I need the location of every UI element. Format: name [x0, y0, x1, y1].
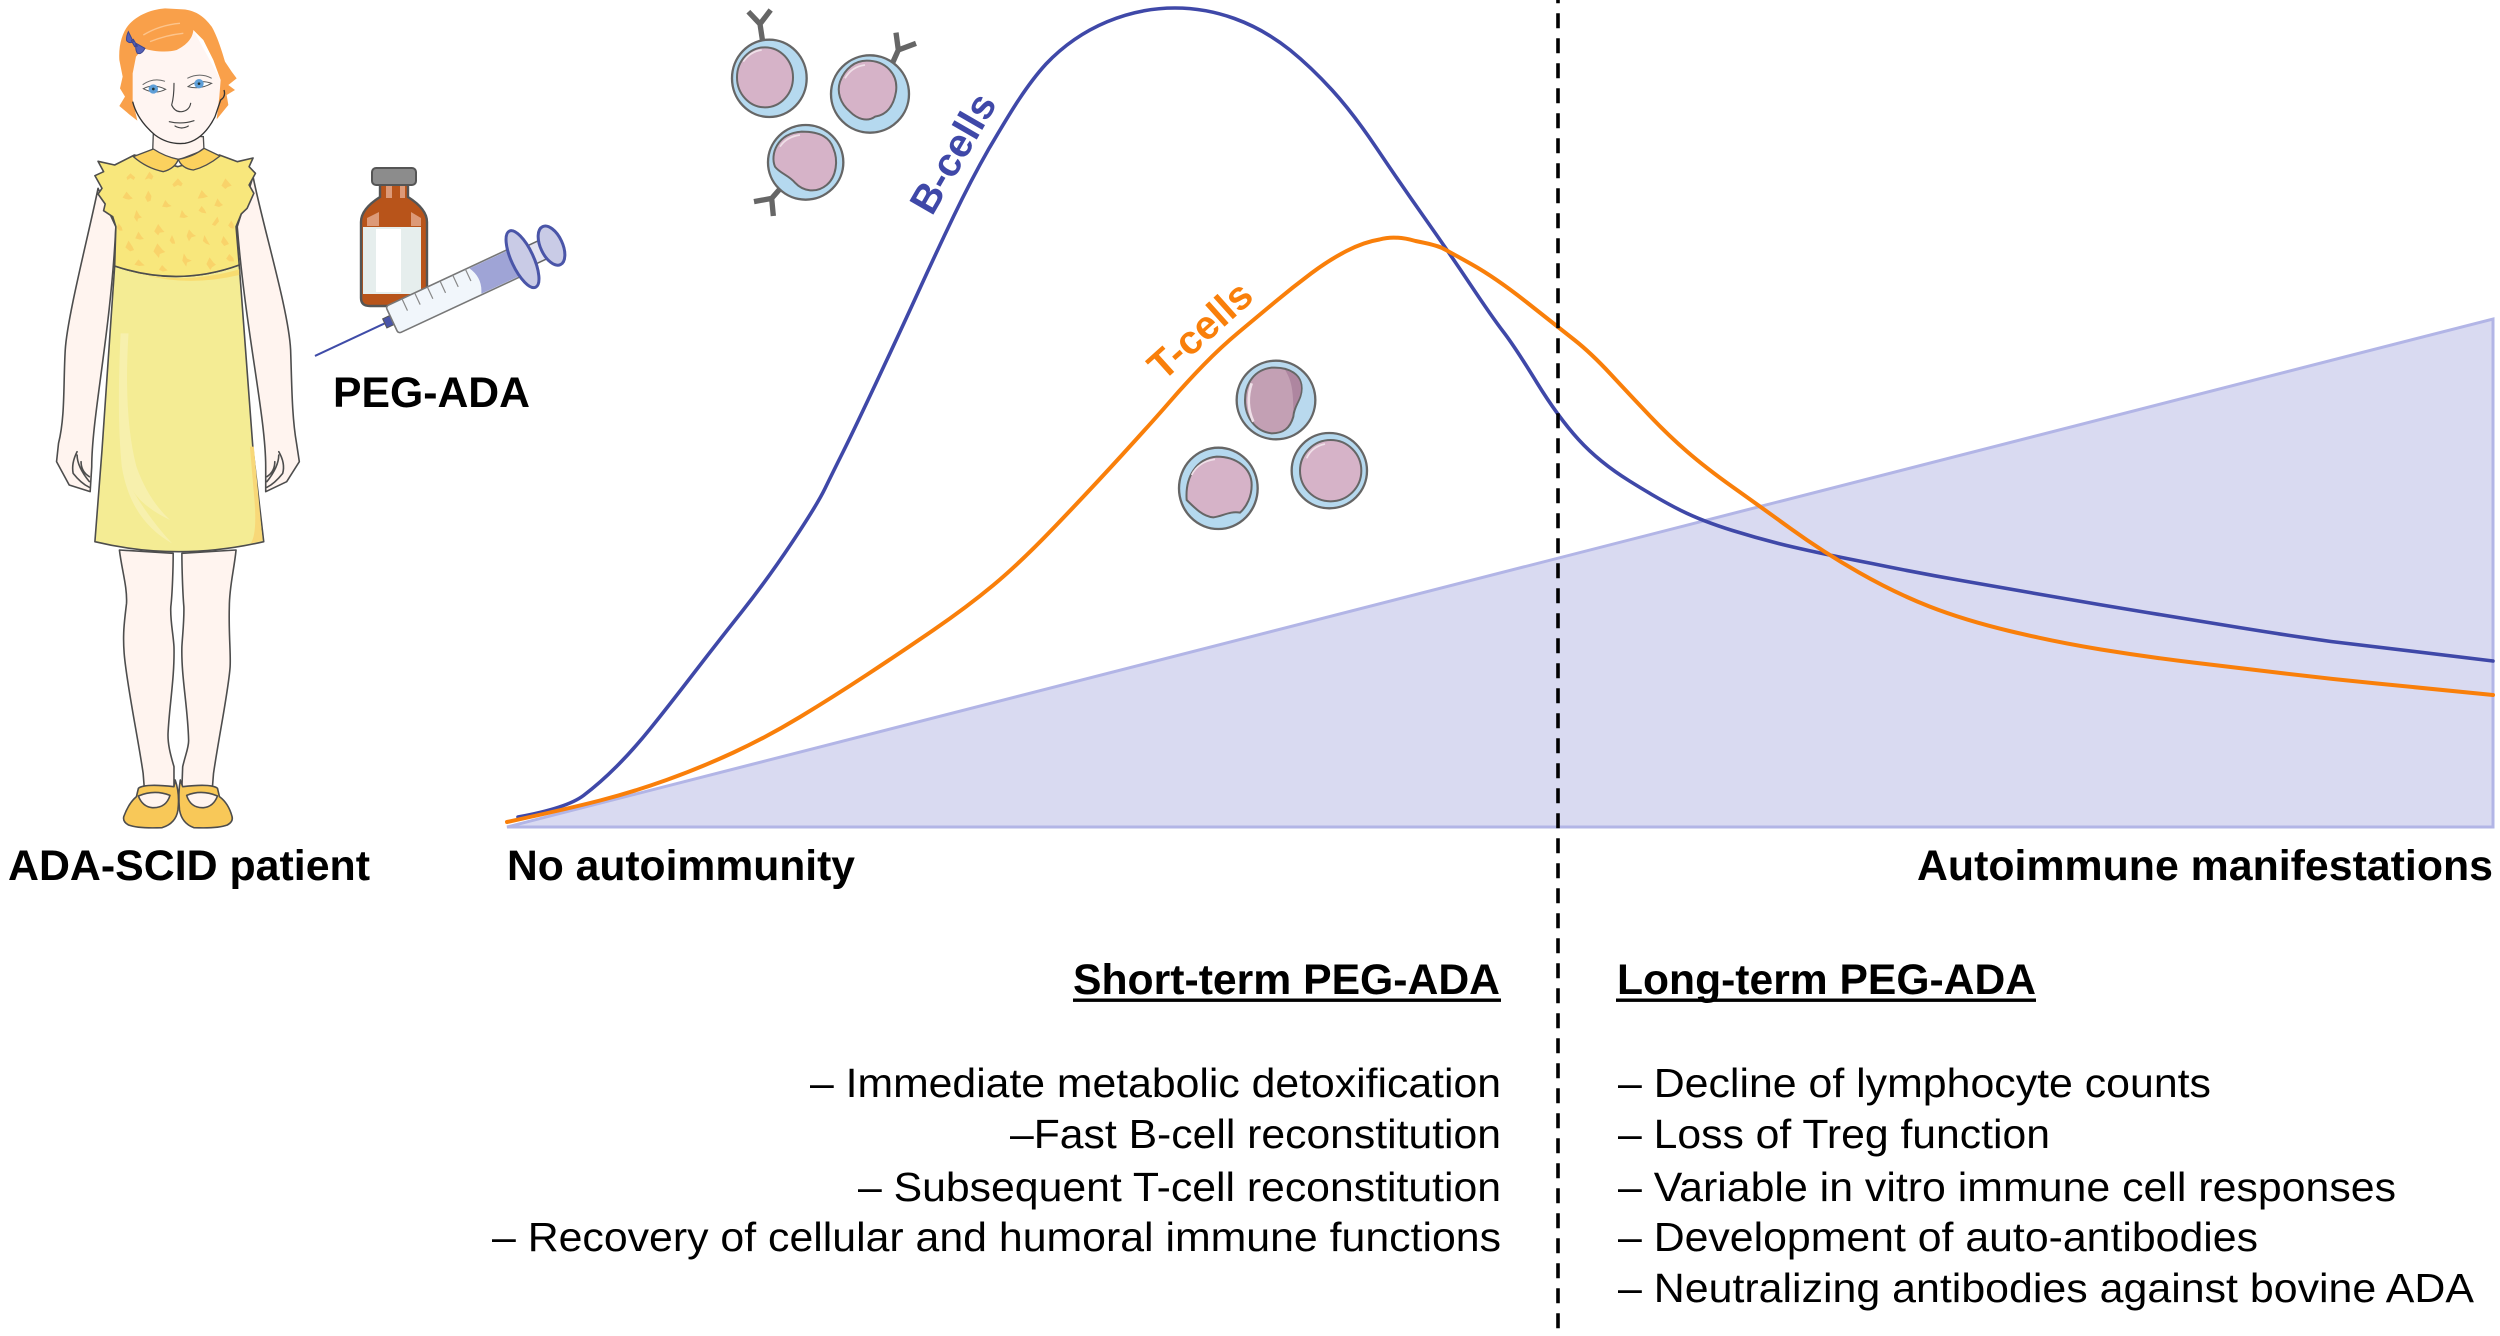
right leg	[182, 550, 236, 788]
vial body	[361, 184, 427, 306]
heading: Long-term PEG-ADA: Long-term PEG-ADA	[1617, 956, 2036, 1004]
text block: long-term effects: – Neutralizing antibodies against bovine ADA	[1618, 1265, 2475, 1311]
text block: short-term effects: – Subsequent T-cell reconstitution	[858, 1164, 1501, 1210]
icon: T-cells cluster	[1179, 361, 1367, 529]
hub	[383, 315, 394, 328]
thumb rest	[533, 222, 570, 269]
plunger head	[469, 249, 524, 294]
label: B-cells: B-cells	[902, 86, 1005, 222]
graduation ticks	[402, 269, 471, 311]
text block: short-term effects: – Recovery of cellular and humoral immune functions	[492, 1214, 1501, 1260]
icon: PEG-ADA syringe	[302, 213, 575, 384]
left eye	[143, 80, 166, 94]
line: B-cell curve	[518, 8, 2493, 817]
icon: PEG-ADA vial	[361, 168, 427, 306]
bodice with frilled sleeves	[95, 155, 255, 276]
hair highlights	[143, 23, 183, 42]
jaw outline	[133, 90, 225, 144]
B-cell 1	[732, 10, 807, 117]
left leg	[119, 550, 174, 788]
heading: Short-term PEG-ADA: Short-term PEG-ADA	[1073, 956, 1500, 1004]
text block: long-term effects: – Decline of lymphocyte counts	[1618, 1060, 2211, 1106]
icon: ADA-SCID girl	[57, 155, 299, 828]
left arm and hand	[57, 188, 116, 492]
highlights on glass	[367, 186, 421, 226]
line: T-cell curve	[507, 238, 2493, 822]
right arm and hand	[237, 177, 299, 492]
needle	[315, 323, 385, 356]
B-cell 2	[831, 33, 916, 133]
label	[363, 227, 421, 294]
label: PEG-ADA: PEG-ADA	[333, 369, 530, 417]
face	[133, 30, 221, 144]
nose and mouth	[169, 83, 194, 128]
collar	[133, 148, 220, 172]
label: Autoimmune manifestations: Autoimmune manifestations	[1917, 842, 2493, 890]
right shoe	[179, 780, 232, 828]
flange	[499, 226, 546, 292]
area chart: autoimmunity triangle	[507, 319, 2493, 827]
dashed divider: short-term vs long-term	[1556, 0, 1560, 1336]
text block: long-term effects: – Development of auto-antibodies	[1618, 1214, 2258, 1260]
B-cell 3	[754, 125, 843, 216]
label: No autoimmunity: No autoimmunity	[507, 842, 855, 890]
label: ADA-SCID patient: ADA-SCID patient	[8, 842, 370, 890]
icon: B-cells cluster	[732, 10, 916, 216]
skirt	[95, 265, 264, 552]
floral pattern	[117, 172, 234, 272]
neck	[153, 133, 204, 160]
text block: long-term effects: – Variable in vitro immune cell responses	[1618, 1164, 2396, 1210]
text block: short-term effects: – Immediate metabolic detoxification	[810, 1060, 1501, 1106]
hair bow	[127, 32, 145, 54]
hair	[119, 8, 237, 121]
T-cell 2	[1292, 433, 1367, 508]
plunger rod	[520, 237, 554, 267]
left shoe	[124, 780, 179, 828]
label: T-cells: T-cells	[1140, 273, 1262, 389]
right eye	[187, 75, 212, 88]
barrel	[386, 247, 525, 334]
text block: short-term effects: –Fast B-cell reconstitution	[1010, 1111, 1501, 1157]
cap	[372, 168, 416, 185]
text block: long-term effects: – Loss of Treg function	[1618, 1111, 2050, 1157]
icon: girl's head	[119, 8, 237, 172]
text block: long-term effects	[1618, 1060, 2475, 1311]
T-cell 1	[1237, 361, 1315, 439]
text block: short-term effects	[492, 1060, 1501, 1260]
T-cell 3	[1179, 448, 1258, 529]
